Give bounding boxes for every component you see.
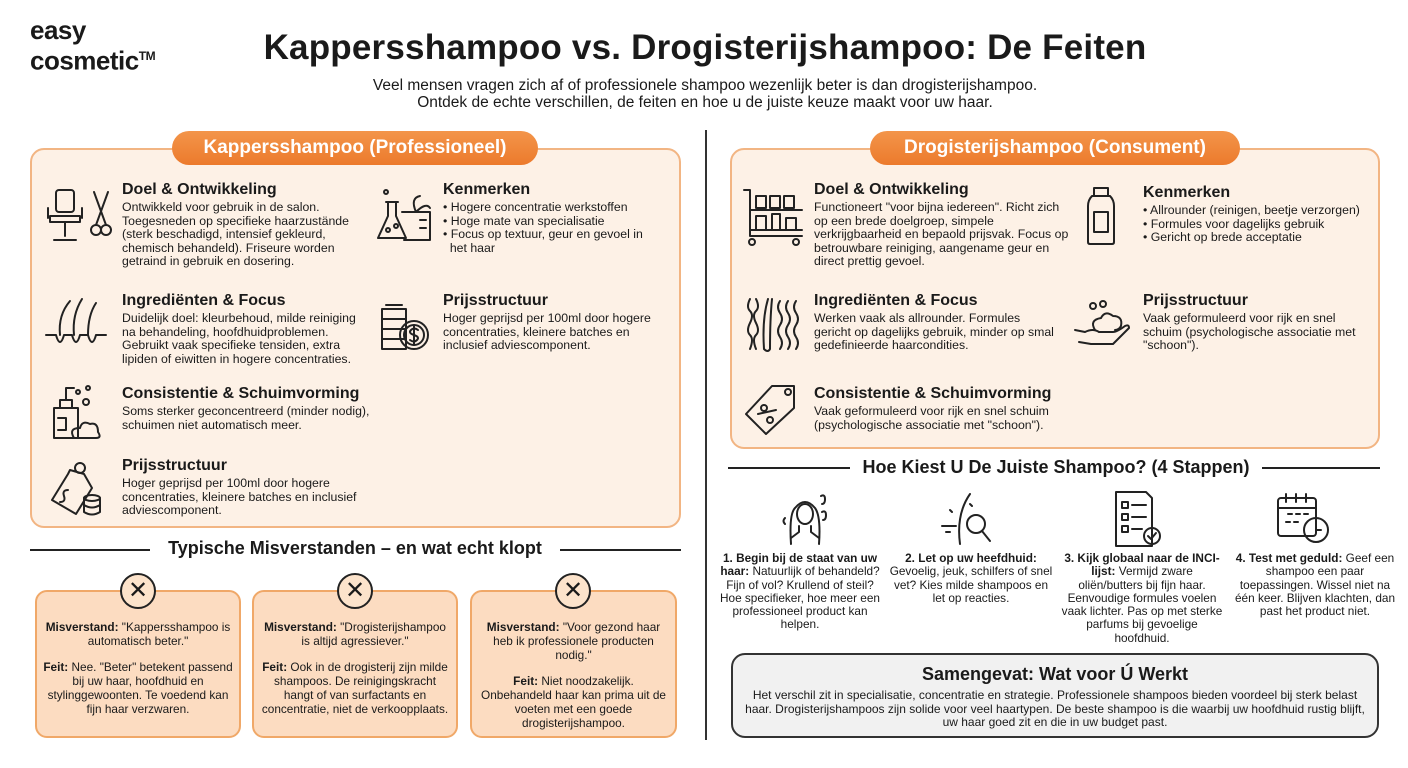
block: consistentie: Consistentie & Schuimvorming [122,385,359,402]
block: prijs right [443,292,651,352]
block: prijs drog: Vaak geformuleerd voor rijk en snel schuim (psychologische associatie met "schoon"). [1143,311,1356,352]
block: kenmerken drog: Kenmerken [1143,184,1230,201]
step 2: 2. Let op uw heefdhuid: Gevoelig, jeuk, schilfers of snel vet? Kies milde shampoos en let op reacties. [890,551,1052,605]
block: consist drog [814,385,1051,432]
block: kenmerken drog: • Allrounder (reinigen, beetje verzorgen) [1143,203,1360,217]
card 3: Misverstand: "Voor gezond haar heb ik professionele producten nodig." [487,620,660,662]
title: Kappersshampoo vs. Drogisterijshampoo: De Feiten [264,28,1146,67]
pill: drogisterij header [870,131,1240,165]
subtitle [373,77,1037,111]
block: doel: Doel & Ontwikkeling [122,181,277,198]
step 1: 1. Begin bij de staat van uw haar: Natuurlijk of behandeld? Fijn of vol? Krullend of steil? Hoe specifieker, hoe meer een professioneel product kan helpen. [720,551,880,631]
block: ingr drog: Werken vaak als allrounder. Formules gericht op dagelijks gebruik, minder op smal gedefinieerde haarcondities. [814,311,1054,352]
block: kenmerken drog: • Formules voor dagelijks gebruik [1143,217,1324,231]
card 2: Feit: Ook in de drogisterij zijn milde shampoos. De reinigingskracht hangt of van surfactants en concentratie, niet de verkoopplaats. [262,660,448,716]
icon: hair types [747,298,799,352]
block: consist drog: Vaak geformuleerd voor rijk en snel schuim (psychologische associatie met "schoon"). [814,404,1049,432]
card 1: Feit: Nee. "Beter" betekent passend bij uw haar, hoofdhuid en stylinggewoonten. Te voedend kan fijn haar verzwaren. [43,660,233,716]
block: kenmerken drog [1143,184,1360,244]
icon: x 1 [120,573,156,609]
icon: x 1: ✕ [128,577,148,604]
icon: pump bottle foam [53,385,101,439]
logo: easy [30,15,86,45]
icon: store shelf cart [743,189,803,246]
logo [30,15,155,76]
block: ingredienten: Ingrediënten & Focus [122,292,286,309]
panel: kappersshampoo [30,148,681,528]
block: prijs [122,457,356,517]
block: consist drog: Consistentie & Schuimvorming [814,385,1051,402]
block: kenmerken drog: • Gericht op brede acceptatie [1143,230,1302,244]
block: kenmerken [443,181,643,255]
block: kenmerken: • Hogere concentratie werkstoffen [443,200,628,214]
logo: cosmeticTM [30,46,155,76]
block: consistentie: Soms sterker geconcentreerd (minder nodig), schuimen niet automatisch meer. [122,404,369,432]
icon: calendar clock [1277,493,1329,543]
icon: foam hand [1074,300,1130,345]
icon: checklist [1115,491,1161,547]
icon: x 2: ✕ [345,577,365,604]
panel: drogisterij [730,148,1380,449]
pill: kappersshampoo header [172,131,538,165]
summary title: Samengevat: Wat voor Ú Werkt [922,664,1188,684]
icon: hair magnifier [941,493,991,545]
card 3: Feit: Niet noodzakelijk. Onbehandeld haar kan prima uit de voeten met een goede drogisterijshampoo. [481,674,666,730]
step 3: 3. Kijk globaal naar de INCI-lijst: Vermijd zware oliën/butters bij fijn haar. Eenvoudige formules voelen vaak lichter. Pas op met sterke parfums bij gevoelige hoofdhuid. [1062,551,1222,645]
step 4: 4. Test met geduld: Geef een shampoo een paar toepassingen. Wissel niet na één keer. Blijven klachten, dan past het product niet. [1235,551,1395,618]
block: kenmerken: Kenmerken [443,181,530,198]
block: kenmerken: • Hoge mate van specialisatie [443,214,605,228]
icon: price tag coins [51,462,101,516]
pill: kappersshampoo header: Kappersshampoo (Professioneel) [203,137,507,158]
card 1 [35,590,241,738]
card 2 [252,590,458,738]
icon: x 3: ✕ [563,577,583,604]
icon: flask plant [377,189,431,241]
heading: misverstanden [30,549,150,551]
card 1: Misverstand: "Kappersshampoo is automatisch beter." [46,620,230,648]
icon: shampoo bottle [1087,187,1115,245]
icon: salon chair [47,189,112,241]
block: doel: Ontwikkeld voor gebruik in de salon. Toegesneden op specifieke haarzustände (sterk beschadigd, intensief gekleurd, chemisch behandeld). Friseure worden getraind in gebruik en dosering. [122,200,349,268]
icon: x 3 [555,573,591,609]
subtitle: Ontdek de echte verschillen, de feiten en hoe u de juiste keuze maakt voor uw haar. [417,94,993,111]
block: prijs right: Prijsstructuur [443,292,548,309]
pill: drogisterij header: Drogisterijshampoo (Consument) [904,137,1206,158]
block: prijs: Prijsstructuur [122,457,227,474]
block: prijs right: Hoger geprijsd per 100ml door hogere concentraties, kleinere batches en inclusief adviescomponent. [443,311,651,352]
block: consistentie [122,385,369,432]
card 3 [470,590,677,738]
subtitle: Veel mensen vragen zich af of professionele shampoo wezenlijk beter is dan drogisterijshampoo. [373,77,1037,94]
block: prijs drog: Prijsstructuur [1143,292,1248,309]
icon: hair follicles [45,298,107,343]
text: Hoe Kiest U De Juiste Shampoo? (4 Stappen) [862,457,1250,477]
block: ingr drog: Ingrediënten & Focus [814,292,978,309]
summary text: Het verschil zit in specialisatie, concentratie en strategie. Professionele shampoos bieden voordeel bij sterk belast haar. Drogisterijshampoos zijn solide voor veel haartypen. De beste shampoo is die waarbij uw hoofdhuid rustig blijft, uw haar goed zit en die in uw budget past. [745,688,1365,729]
block: doel drog: Functioneert "voor bijna iedereen". Richt zich op een brede doelgroep, simpele verkrijgbaarheid en bepaold prijsvak. Focus op betrouwbare reiniging, aangename geur en direct prettig gevoel. [814,200,1068,268]
block: kenmerken: • Focus op textuur, geur en gevoel in [443,227,643,241]
icon: x 2 [337,573,373,609]
block: doel drog: Doel & Ontwikkeling [814,181,969,198]
block: prijs drog [1143,292,1356,352]
block: ingr drog [814,292,1054,352]
block: ingredienten: Duidelijk doel: kleurbehoud, milde reiniging na behandeling, hoofdhuidproblemen. Gebruikt vaak specifieke tensiden, extra lipiden of eiwitten in hogere concentraties. [122,311,356,366]
heading: 4 stappen [728,467,850,469]
icon: coins dollar [381,304,429,350]
summary box [731,653,1379,738]
icon: woman question [782,494,827,545]
block: prijs: Hoger geprijsd per 100ml door hogere concentraties, kleinere batches en inclusief advies­component. [122,476,356,517]
block: kenmerken: het haar [450,241,495,255]
icon: discount tag [745,385,795,435]
card 2: Misverstand: "Drogisterij­shampoo is altijd agressiever." [264,620,446,648]
text: Typische Misverstanden – en wat echt klopt [168,538,542,558]
